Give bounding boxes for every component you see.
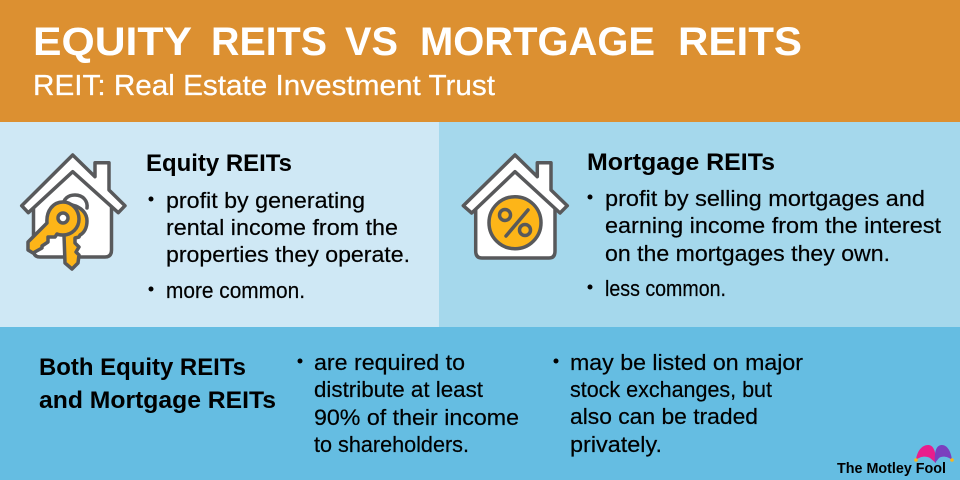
bullet list: mortgage REITs: earning income from the interest	[605, 213, 942, 238]
bullet: income distribution: to shareholders.	[314, 432, 469, 457]
bullet: income distribution: distribute at least	[314, 377, 484, 402]
bullet list: equity REITs: rental income from the	[166, 215, 398, 240]
bullet list: equity REITs: profit by generating	[166, 188, 365, 213]
bullet list: equity REITs: properties they operate.	[166, 242, 410, 267]
title: MORTGAGE	[420, 20, 655, 64]
logo: The Motley Fool	[837, 445, 954, 477]
bullet list: equity REITs	[148, 188, 410, 303]
bullet: listing: also can be traded	[570, 404, 758, 429]
heading: Equity REITs: Equity REITs	[146, 150, 292, 177]
bullet: listing	[554, 350, 804, 457]
title: VS	[345, 20, 398, 64]
bullet: income distribution	[298, 350, 519, 457]
title: EQUITY	[33, 20, 192, 64]
bullet: listing: may be listed on major	[570, 350, 804, 375]
title: REITS	[211, 20, 327, 64]
bullet list: mortgage REITs: profit by selling mortgages and	[605, 186, 925, 211]
icon: jester hat	[914, 445, 954, 463]
panel: header	[0, 0, 960, 122]
icon: house with percent	[463, 155, 567, 258]
icon: house with keys	[22, 155, 125, 269]
heading: Mortgage REITs: Mortgage REITs	[587, 149, 775, 176]
bullet: listing: privately.	[570, 432, 662, 457]
subtitle: REIT: Real Estate Investment Trust	[33, 70, 495, 102]
bullet list: equity REITs: more common.	[166, 278, 305, 303]
bullet list: mortgage REITs: less common.	[605, 276, 726, 301]
panel: mortgage REITs	[439, 122, 960, 327]
heading: both REIT types: and Mortgage REITs	[39, 387, 276, 414]
bullet: income distribution: are required to	[314, 350, 465, 375]
logo: The Motley Fool: The Motley Fool	[837, 461, 946, 477]
bullet list: mortgage REITs	[588, 186, 942, 301]
heading: both REIT types: Both Equity REITs	[39, 354, 246, 381]
bullet: listing: stock exchanges, but	[570, 377, 773, 402]
panel: both types	[0, 327, 960, 480]
title: REITS	[678, 20, 802, 64]
panel: equity REITs	[0, 122, 439, 327]
bullet: income distribution: 90% of their income	[314, 405, 519, 430]
bullet list: mortgage REITs: on the mortgages they own.	[605, 241, 890, 266]
title	[33, 20, 802, 64]
heading: both REIT types	[39, 354, 276, 414]
